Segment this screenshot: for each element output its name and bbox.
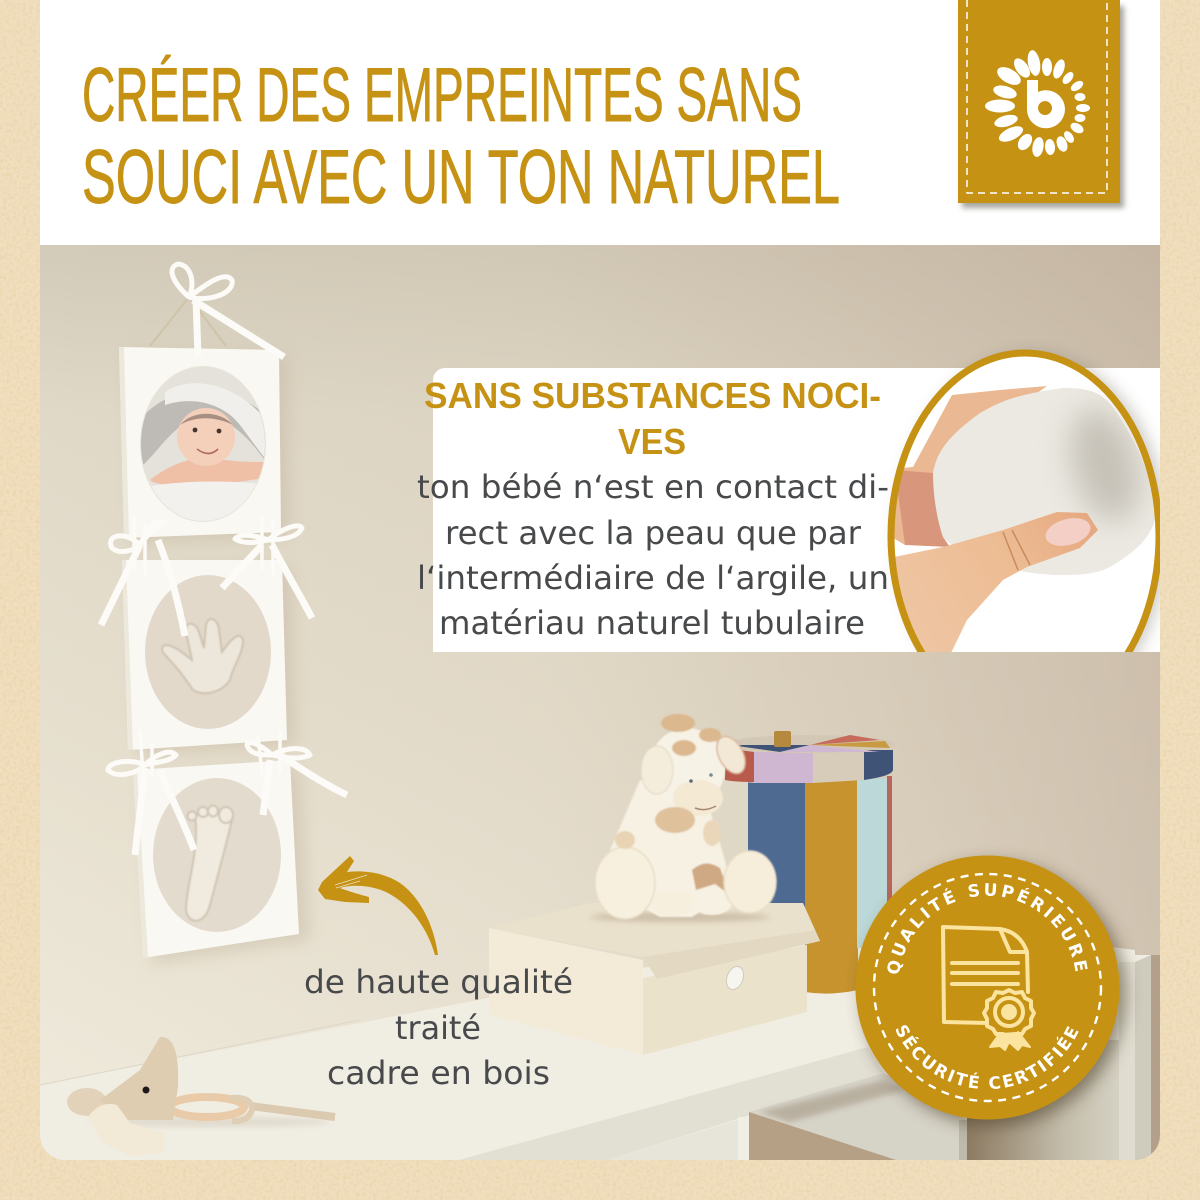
callout text: l‘intermédiaire de l‘argile, un (417, 559, 889, 597)
callout text: matériau naturel tubulaire (439, 604, 865, 642)
icon: certificate (943, 927, 1034, 1050)
title (82, 53, 840, 220)
panel: white background (433, 368, 1160, 652)
callout: caption text (304, 963, 573, 1092)
clay photo oval (888, 348, 1160, 652)
ribbons (101, 264, 347, 855)
arrow (318, 856, 438, 955)
storage box (489, 903, 820, 1055)
callout text: VES (618, 421, 686, 462)
logo tag (958, 0, 1124, 208)
plush cow (595, 714, 776, 919)
hanging frames (101, 264, 347, 964)
badge top text: QUALITÉ SUPÉRIEURE (887, 883, 1088, 974)
handprint (162, 619, 243, 693)
thumb and palm (880, 512, 1098, 655)
icon: brand sun logo (985, 49, 1090, 158)
frame: footprint (133, 760, 299, 958)
hanging cord (150, 297, 226, 346)
frame shadows (128, 352, 310, 964)
callout: caption text: de haute qualité (304, 963, 573, 1001)
title: SOUCI AVEC UN TON NATUREL (82, 135, 840, 220)
footprint (186, 806, 233, 921)
callout text: rect avec la peau que par (445, 514, 862, 552)
shelf (40, 944, 1160, 1160)
hand (880, 386, 1047, 545)
wall (40, 245, 1160, 1160)
clay ball (933, 388, 1157, 575)
teething toy (67, 1037, 335, 1156)
callout panel (418, 348, 1160, 652)
room photo (40, 245, 1163, 1160)
callout text: SANS SUBSTANCES NOCI- (424, 375, 881, 416)
frame: baby photo (119, 347, 281, 538)
badge bottom text: SÉCURITÉ CERTIFIÉE (896, 1025, 1079, 1089)
hat box (713, 731, 894, 994)
callout: caption text: traité (395, 1009, 481, 1047)
frame: handprint (122, 560, 287, 750)
callout: caption text: cadre en bois (327, 1054, 550, 1092)
callout text: ton bébé n‘est en contact di- (417, 468, 889, 506)
shadow under toy (590, 912, 770, 922)
quality badge (851, 852, 1137, 1134)
header panel (40, 0, 1160, 246)
callout text (417, 375, 889, 642)
